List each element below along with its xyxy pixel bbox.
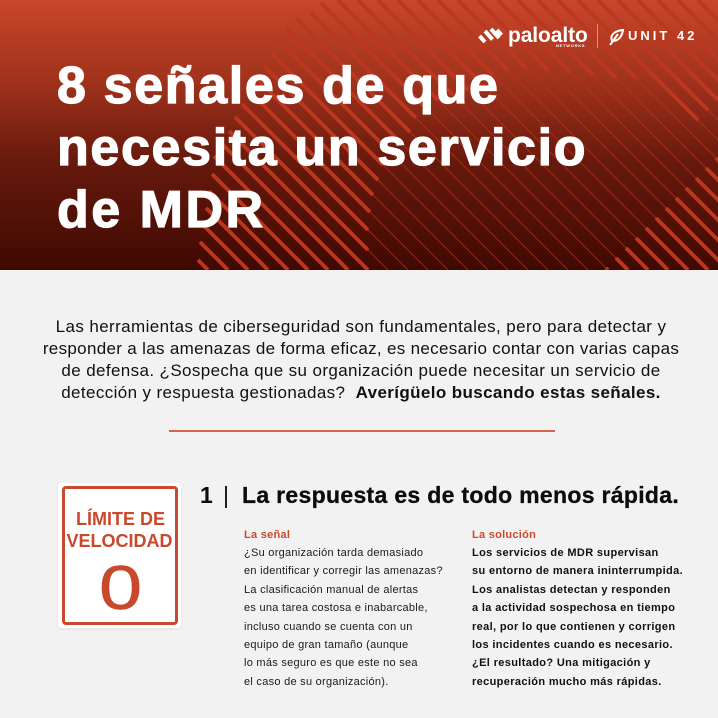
signal text: La clasificación manual de alertas [244,584,418,596]
logos [478,24,697,48]
signal text: ¿Su organización tarda demasiado [244,547,423,559]
logo divider [597,24,598,48]
intro paragraph: Las herramientas de ciberseguridad son fundamentales, pero para detectar y [56,317,666,336]
solution text: Los servicios de MDR supervisan [472,547,659,559]
intro paragraph: detección y respuesta gestionadas? Averígüelo buscando estas señales. [61,383,661,402]
solution text: Los analistas detectan y responden [472,584,671,596]
solution text: los incidentes cuando es necesario. [472,639,673,651]
section heading: La respuesta es de todo menos rápida. [242,482,679,508]
icon: Unit 42 mark [609,28,624,46]
intro paragraph: de defensa. ¿Sospecha que su organización puede necesitar un servicio de [61,361,661,380]
logo text: networks: NETWORKS [556,43,585,48]
signal text: equipo de gran tamaño (aunque [244,639,408,651]
solution text: ¿El resultado? Una mitigación y [472,657,651,669]
solution text [472,547,683,688]
sign text: speed: VELOCIDAD [66,531,172,551]
diagonal stripe pattern [196,0,718,270]
signal text: el caso de su organización). [244,676,389,688]
sign text: limit: LÍMITE DE [76,509,165,529]
icon: Palo Alto mark [478,28,503,44]
title [57,57,587,239]
column: la señal [244,529,443,688]
solution text: recuperación mucho más rápidas. [472,676,662,688]
solution text: su entorno de manera ininterrumpida. [472,565,683,577]
solution text: real, por lo que contienen y corrigen [472,621,675,633]
section heading: | [223,482,229,508]
sign number: 0 [99,554,142,623]
signal text: lo más seguro es que este no sea [244,657,418,669]
logo text: paloalto: paloalto [508,24,588,47]
subheading: la señal: La señal [244,529,290,541]
icon: speed limit sign [58,483,181,628]
title: de MDR [57,181,266,239]
signal text [244,547,443,688]
signal text: en identificar y corregir las amenazas? [244,565,443,577]
header banner [0,0,718,270]
solution text: a la actividad sospechosa en tiempo [472,602,675,614]
column: la solución [472,529,683,688]
signal text: incluso cuando se cuenta con un [244,621,413,633]
intro paragraph: responder a las amenazas de forma eficaz, es necesario contar con varias capas [43,339,679,358]
signal text: es una tarea costosa e inabarcable, [244,602,428,614]
subheading: la solución: La solución [472,529,536,541]
logo text: Unit 42: UNIT 42 [628,28,697,43]
title: necesita un servicio [57,119,587,177]
intro paragraph [43,317,679,402]
title: 8 señales de que [57,57,500,115]
section heading: 1 [200,482,213,508]
